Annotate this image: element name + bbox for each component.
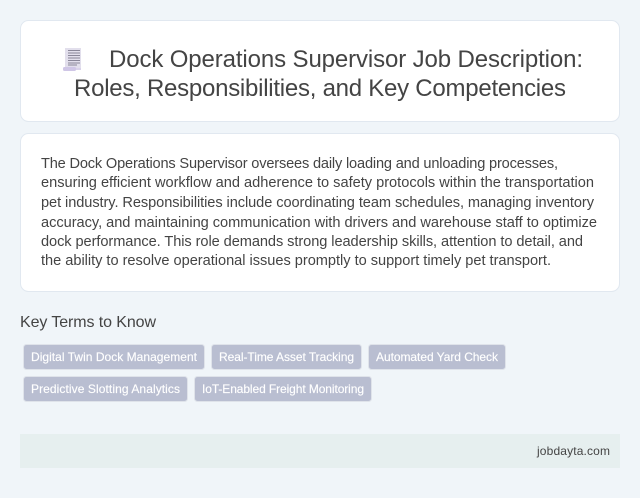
tag: freight: IoT-Enabled Freight Monitoring: [202, 382, 364, 396]
text block: description paragraph: dock performance. This role demands strong leadership skills, attention to detail, and: [41, 234, 583, 250]
tag: asset tracking: Real-Time Asset Tracking: [219, 350, 354, 364]
tags: key terms: [24, 344, 506, 402]
icon: paper receipt scroll: [63, 48, 81, 71]
text block: description paragraph: the ability to resolve operational issues promptly to support timely pet transport.: [41, 253, 551, 269]
heading: key terms: Key Terms to Know: [20, 314, 156, 331]
tag: slotting: [24, 376, 188, 402]
text block: description paragraph: The Dock Operations Supervisor oversees daily loading and unloading processes,: [41, 156, 558, 172]
text block: description paragraph: accuracy, and maintaining communication with drivers and warehouse staff to optimize: [41, 215, 597, 231]
heading: title: Dock Operations Supervisor Job Description:: [109, 46, 583, 73]
panel: job description: [20, 134, 620, 292]
tag: yard check: [368, 344, 506, 370]
heading: title: [74, 46, 583, 102]
footer text: jobdayta.com: [536, 444, 610, 458]
text block: description paragraph: ensuring efficient workflow and adherence to safety protocols within the transportation: [41, 175, 594, 191]
text block: description paragraph: pet industry. Responsibilities include coordinating team schedules, managing inventory: [41, 195, 595, 211]
tag: asset tracking: [212, 344, 362, 370]
tag: freight: [194, 376, 372, 402]
tag: digital twin: [24, 344, 204, 370]
tag: yard check: Automated Yard Check: [376, 350, 499, 364]
footer bar: [20, 434, 620, 468]
heading: title: Roles, Responsibilities, and Key Competencies: [74, 75, 566, 102]
tag: slotting: Predictive Slotting Analytics: [31, 382, 180, 396]
panel: title card: [20, 20, 620, 122]
tag: digital twin: Digital Twin Dock Management: [31, 350, 198, 364]
text block: description paragraph: [41, 156, 597, 269]
